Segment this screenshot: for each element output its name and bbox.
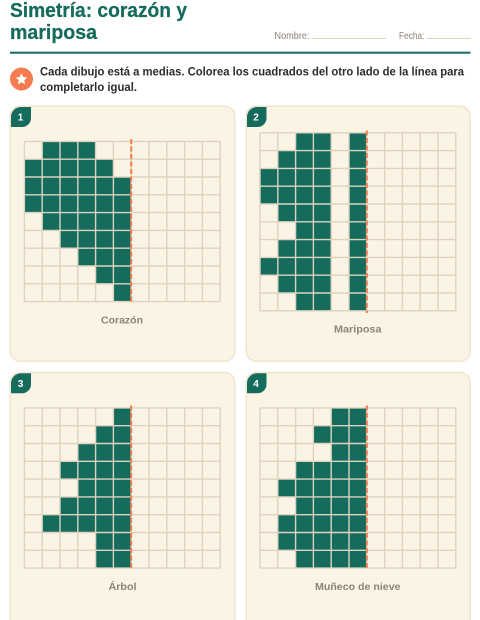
- header: [10, 0, 470, 54]
- number badge 3: [11, 373, 31, 393]
- date field: Fecha:: [399, 31, 424, 42]
- number badge 2: 2: [253, 112, 259, 124]
- icon: star: [10, 68, 33, 90]
- instruction text: Cada dibujo está a medias. Colorea los cuadrados del otro lado de la línea para: [40, 66, 465, 78]
- label: Mariposa: Mariposa: [334, 324, 382, 336]
- name field: Nombre:: [274, 31, 310, 42]
- title: mariposa: [10, 22, 98, 44]
- header rule: [10, 52, 470, 54]
- grid: corazón half: [24, 141, 220, 302]
- panel: corazón: [10, 106, 235, 361]
- panel: muñeco de nieve: [246, 372, 470, 620]
- number badge 2: [247, 107, 266, 127]
- grid: mariposa half: [260, 133, 456, 311]
- label: Árbol: Árbol: [108, 580, 137, 593]
- symmetry line: [130, 406, 132, 570]
- grid: árbol half: [24, 408, 220, 568]
- number badge 1: [11, 107, 31, 127]
- label: Muñeco de nieve: Muñeco de nieve: [315, 581, 401, 593]
- number badge 3: 3: [18, 379, 24, 390]
- symmetry line: [366, 406, 368, 570]
- name field: [274, 31, 386, 42]
- title: [10, 0, 188, 44]
- date field: [399, 31, 470, 42]
- instruction text: [40, 66, 465, 94]
- panel: mariposa: [246, 106, 470, 361]
- title: Simetría: corazón y: [10, 0, 188, 22]
- instruction: [10, 66, 465, 94]
- number badge 1: 1: [18, 112, 24, 124]
- grid: muñeco de nieve half: [260, 408, 456, 568]
- symmetry line: [130, 139, 132, 304]
- instruction text: completarlo igual.: [40, 81, 137, 94]
- symmetry line: [366, 130, 368, 313]
- panel: árbol: [10, 372, 235, 620]
- number badge 4: [247, 373, 266, 393]
- label: Corazón: Corazón: [101, 314, 143, 326]
- number badge 4: 4: [253, 379, 259, 390]
